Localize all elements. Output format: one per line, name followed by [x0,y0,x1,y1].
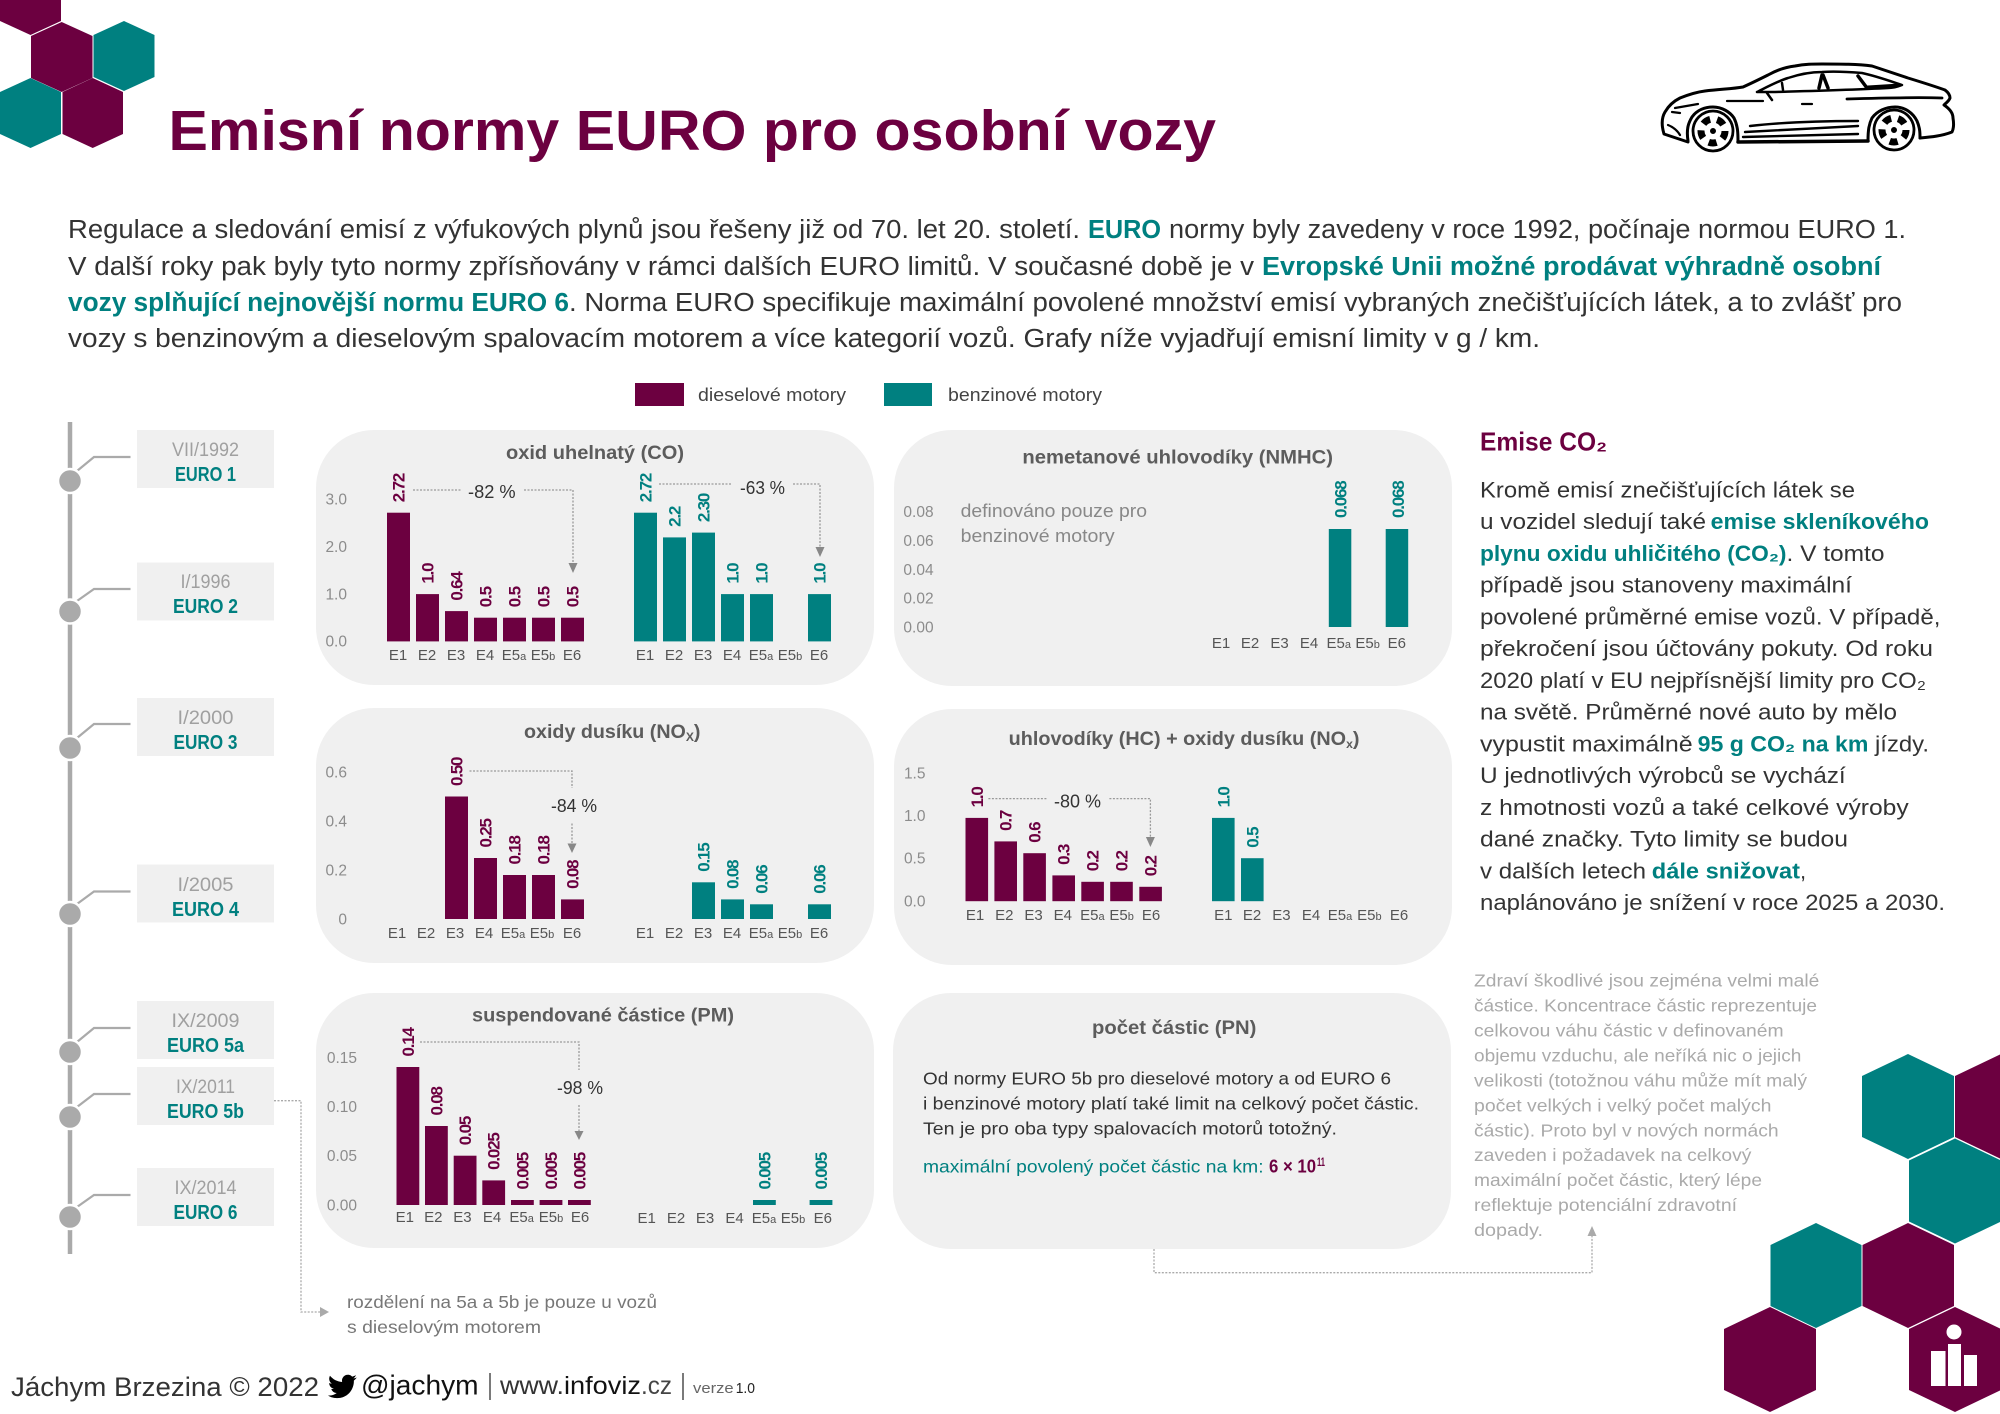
hexagon decoration: bottom right [1724,1054,2000,1412]
x labels: NMHC: E5a [1326,635,1352,652]
x labels: NOx: E1 [388,925,406,942]
x labels: NOx: E6 [563,925,581,942]
timeline item: EURO 2: I/1996 [180,572,230,593]
heading: NMHC: nemetanové uhlovodíky (NMHC) [1022,447,1333,469]
values: NOx: 0.08 [564,860,582,889]
heading: HC + NOx: uhlovodíky (HC) + oxidy dusíku (NO [1009,728,1341,750]
x labels: NMHC: E2 [1241,635,1259,652]
values: NMHC [1332,481,1408,518]
legend: benzinové motory [948,384,1103,405]
text block: CO2 emissions: . V tomto [1786,541,1884,566]
footer: verze [693,1380,734,1397]
x labels: CO: E1 [389,647,407,664]
bars: NOx petrol [692,882,831,919]
x labels: NMHC: E6 [1388,635,1406,652]
y axis: HC + NOx: 0.0 [904,894,926,910]
values: NOx: 0.15 [694,843,714,872]
values: NOx: 0.06 [810,865,830,894]
text block: particle health note: reflektuje potenciální zdravotní [1474,1195,1737,1215]
x labels: CO: E1 [636,647,654,664]
values: CO: 1.0 [724,563,742,584]
values: CO: 1.0 [752,563,772,584]
text block: particle health note: celkovou váhu částic v definovaném [1474,1021,1784,1041]
x labels: NMHC: E3 [1270,635,1289,652]
x labels: PM: E6 [571,1209,589,1226]
intro text block [68,216,1906,353]
text block: CO2 emissions: emise skleníkového [1711,509,1929,534]
x labels: PM: E2 [424,1209,442,1226]
x labels: HC + NOx: E6 [1390,907,1408,924]
x labels: CO: E4 [476,647,494,664]
x labels: CO: E4 [723,647,741,664]
y axis: HC + NOx: 1.0 [904,808,926,825]
timeline item: EURO 3: I/2000 [178,708,234,729]
x labels: HC + NOx: E3 [1024,907,1043,924]
values: CO: 0.64 [448,571,466,601]
x labels: PM: E3 [696,1210,714,1227]
heading: NOx: oxidy dusíku (NO [524,721,684,743]
bars: PM petrol [753,1200,832,1205]
heading: Emise CO2: Emise CO₂ [1480,427,1607,457]
values: CO: 0.5 [506,586,524,607]
intro text block: vozy s benzinovým a dieselovým spalovacím motorem a více kategorií vozů. Grafy níže vyjadřují emisní limity v g / km. [68,325,1540,353]
text: maximum particle count: 11 [1317,1155,1325,1169]
text block: CO2 emissions: na světě. Průměrné nové auto by mělo [1480,700,1897,725]
text block: particle health note: počet velkých i velký počet malých [1474,1096,1771,1116]
x labels: NOx: E5b [530,925,554,942]
y axis: NOx: 0.6 [325,764,347,782]
x labels: NOx: E4 [475,925,493,942]
y axis: NMHC: 0.04 [903,562,934,579]
text block: CO2 emissions [1480,478,1945,915]
text block: CO2 emissions: 95 g CO₂ na km [1698,732,1868,756]
text block: particle health note: velikosti (totožnou váhu může mít malý [1474,1071,1807,1091]
x labels: NMHC: E5b [1355,635,1380,652]
x labels: HC + NOx: E5a [1328,907,1353,924]
timeline item: EURO 5a [58,1001,274,1064]
values: NOx: 0.50 [448,757,466,786]
x labels: CO: E6 [810,647,828,664]
heading: PN: počet částic (PN) [1092,1017,1256,1039]
intro text block: EURO [1088,216,1161,244]
footer: @jachym [361,1370,479,1400]
x labels: NOx: E3 [446,925,464,942]
text block: CO2 emissions: povolené průměrné emise vozů. V případě, [1480,604,1940,630]
text block: CO2 emissions: vypustit maximálně [1480,732,1693,756]
arrow: HC + NOx diesel -80 %: -80 % [1054,792,1101,812]
values: NMHC: 0.068 [1332,481,1350,518]
y axis: PM: 0.00 [327,1198,357,1214]
y axis: PM: 0.05 [327,1148,357,1165]
panel: oxid uhelnatý (CO) [316,430,874,685]
values: HC + NOx [968,787,1262,876]
x labels: NOx: E3 [694,925,712,942]
text block: particle health note: dopady. [1474,1220,1543,1240]
timeline item: EURO 4: I/2005 [178,875,234,896]
y axis: HC + NOx [904,766,926,910]
text block: CO2 emissions: překročení jsou účtovány pokuty. Od roku [1480,636,1933,661]
values: CO: 0.5 [564,586,582,607]
x labels: NOx: E6 [810,925,828,942]
heading: HC + NOx: x [1346,737,1353,751]
x labels: NOx: E2 [417,925,435,942]
heading: PM: suspendované částice (PM) [472,1005,734,1027]
y axis: CO: 1.0 [325,586,347,604]
values: NOx [448,757,830,894]
x labels: PM [396,1209,832,1227]
values: PM: 0.08 [427,1086,446,1116]
x labels: PM: E1 [396,1209,414,1226]
x labels: NOx: E1 [636,925,654,942]
x labels: CO: E5a [502,647,527,664]
front wheel [1693,111,1733,151]
text block: CO2 emissions: 2020 platí v EU nejpřísnější limity pro CO₂ [1480,668,1926,693]
values: PM: 0.005 [755,1152,774,1190]
values: HC + NOx: 1.0 [968,787,987,807]
x labels: HC + NOx: E1 [966,907,984,924]
x labels: PM: E3 [453,1209,472,1226]
x labels: HC + NOx: E5b [1109,907,1134,924]
timeline item: EURO 6 [58,1168,274,1229]
timeline item: EURO 2 [58,562,274,624]
footer [11,1370,755,1402]
panel: počet částic (PN) [893,993,1451,1249]
text: PN description: i benzinové motory platí také limit na celkový počet částic. [923,1093,1419,1113]
values: CO: 1.0 [810,563,830,584]
heading: NOx: X [686,730,694,744]
values: CO [390,473,830,607]
x labels: NOx: E4 [723,925,741,942]
timeline item: EURO 5b: EURO 5b [167,1101,244,1123]
x labels: PM: E5a [752,1210,777,1227]
x labels: NOx: E5a [749,925,774,942]
values: HC + NOx: 0.5 [1243,827,1262,848]
text block: CO2 emissions: případě jsou stanoveny maximální [1480,573,1852,598]
text block: CO2 emissions: u vozidel sledují také [1480,509,1706,534]
values: CO: 2.2 [666,506,684,527]
x labels: HC + NOx: E5a [1080,907,1106,924]
intro text block: normy byly zavedeny v roce 1992, počínaje normou EURO 1. [1169,216,1906,244]
arrow: PM diesel -98 % [420,1042,603,1140]
timeline item: EURO 6: EURO 6 [174,1202,238,1224]
arrow: CO diesel -82 %: -82 % [468,482,516,502]
footer: .cz [641,1372,672,1400]
values: PM: 0.05 [456,1116,475,1145]
arrow: CO petrol -63 %: -63 % [740,478,785,498]
bars: HC + NOx diesel [966,818,1162,901]
values: HC + NOx: 0.2 [1112,851,1132,871]
y axis: NMHC: 0.00 [903,620,934,636]
panel: nemetanové uhlovodíky (NMHC) [894,430,1452,686]
footnote: 5a and 5b [347,1292,657,1337]
panel: suspendované částice (PM) [316,993,874,1248]
footer: 1.0 [736,1380,755,1397]
y axis: PM [327,1050,357,1214]
arrow: NOx diesel -84 %: -84 % [551,796,597,816]
x labels: CO [389,647,828,664]
y axis: CO: 2.0 [325,539,347,556]
hexagon decoration: top left [0,0,154,148]
x labels: HC + NOx: E5b [1357,907,1382,924]
text block: CO2 emissions: U jednotlivých výrobců se vychází [1480,763,1846,788]
text block: particle health note: objemu vzduchu, ale neříká nic o jejich [1474,1046,1801,1066]
text block: particle health note: částice. Koncentrace částic reprezentuje [1474,996,1817,1016]
y axis: NOx [325,764,347,928]
y axis: NOx: 0.4 [325,814,347,830]
x labels: NOx [388,925,828,942]
y axis: CO: 0.0 [325,634,347,650]
text block: particle health note: maximální počet částic, který lépe [1474,1170,1762,1190]
values: HC + NOx: 0.2 [1084,851,1103,871]
x labels: PM: E4 [483,1209,501,1226]
arrow: CO petrol -63 % [659,478,824,557]
x labels: CO: E5b [778,647,802,664]
x labels: HC + NOx: E4 [1302,907,1320,924]
intro text block: vozy splňující nejnovější normu EURO 6 [68,289,569,317]
x labels: NOx: E2 [665,925,683,942]
x labels: PM: E5a [509,1209,535,1226]
y axis: NOx: 0.2 [325,862,347,880]
x labels: HC + NOx: E2 [1243,907,1261,924]
footer: infoviz [564,1372,641,1400]
note: petrol only: benzinové motory [961,526,1115,546]
x labels: HC + NOx: E3 [1272,907,1291,924]
timeline item: EURO 1 [58,430,274,493]
text: PN description: Ten je pro oba typy spalovacích motorů totožný. [923,1118,1337,1138]
values: HC + NOx: 1.0 [1214,787,1233,807]
panel: uhlovodíky (HC) + oxidy dusíku (NOx) [894,709,1452,965]
text block: particle health note: Zdraví škodlivé jsou zejména velmi malé [1474,971,1819,991]
y axis: NMHC: 0.02 [903,590,934,608]
legend [635,383,1103,406]
bars: PM diesel [396,1067,591,1205]
note: petrol only: definováno pouze pro [961,501,1147,521]
arrow: CO diesel -82 % [413,482,578,573]
text block: CO2 emissions: , [1800,858,1806,884]
timeline item: EURO 6: IX/2014 [174,1178,237,1199]
footer: Jáchym Brzezina © 2022 [11,1372,319,1402]
text block: CO2 emissions: dále snižovat [1652,858,1801,884]
timeline item: EURO 1: VII/1992 [172,440,239,461]
x labels: PM: E1 [638,1210,656,1227]
timeline item: EURO 2: EURO 2 [173,596,238,618]
text: maximum particle count: maximální povolený počet částic na km: [923,1157,1264,1177]
icon: car [1662,64,1954,151]
intro text block: . Norma EURO specifikuje maximální povolené množství emisí vybraných znečišťujících látek, a to zvlášť pro [569,289,1902,317]
text: PN description [923,1068,1419,1138]
values: PM: 0.005 [513,1152,532,1190]
arrow: PM diesel -98 %: -98 % [557,1078,603,1098]
heading: NOx: ) [694,721,700,743]
icon: infoviz logo [1931,1324,1977,1386]
values: NOx: 0.25 [476,818,496,848]
values: HC + NOx: 0.2 [1142,856,1161,876]
x labels: PM: E4 [725,1210,744,1227]
values: PM: 0.005 [570,1152,589,1190]
values: PM: 0.14 [399,1026,418,1056]
text block: CO2 emissions: jízdy. [1874,732,1929,756]
values: HC + NOx: 0.6 [1026,822,1045,843]
text: maximum particle count: 6 × 10 [1269,1157,1316,1177]
x labels: CO: E3 [447,647,465,664]
timeline item: EURO 1: EURO 1 [175,464,236,486]
timeline item: EURO 3 [58,698,274,760]
text block: CO2 emissions: z hmotnosti vozů a také celkové výroby [1480,795,1909,820]
values: CO: 0.5 [476,586,496,607]
timeline [58,422,274,1254]
x labels: HC + NOx: E1 [1214,907,1232,924]
values: NOx: 0.06 [752,865,772,894]
values: CO: 0.5 [534,586,554,607]
bars: NOx diesel [445,796,584,919]
text block: CO2 emissions: Kromě emisí znečišťujících látek se [1480,478,1855,502]
bars: CO diesel [387,513,584,641]
intro text block: V další roky pak byly tyto normy zpřísňovány v rámci dalších EURO limitů. V současné době je v [68,253,1254,281]
text block: particle health note [1474,971,1819,1240]
values: NOx: 0.08 [724,860,742,889]
y axis: HC + NOx: 1.5 [904,766,926,782]
y axis: PM: 0.10 [327,1099,357,1116]
intro text block: Regulace a sledování emisí z výfukových plynů jsou řešeny již od 70. let 20. století. [68,216,1080,244]
text block: CO2 emissions: plynu oxidu uhličitého (CO₂) [1480,541,1786,566]
timeline item: EURO 5a: EURO 5a [167,1035,245,1057]
timeline item: EURO 5b: IX/2011 [176,1077,235,1098]
timeline item: EURO 4 [58,864,274,926]
values: NOx: 0.18 [534,835,554,864]
values: PM: 0.005 [542,1152,561,1190]
y axis: PM: 0.15 [327,1050,357,1067]
x labels: HC + NOx: E2 [995,907,1013,924]
timeline item: EURO 3: EURO 3 [174,732,238,754]
y axis: NMHC: 0.08 [903,504,934,521]
x labels: PM: E5b [539,1209,563,1226]
heading: CO: oxid uhelnatý (CO) [506,442,684,464]
values: CO: 2.30 [694,493,714,522]
note: petrol only [961,501,1147,546]
bars: NMHC petrol [1329,529,1408,627]
x labels: CO: E5b [531,647,555,664]
values: CO: 2.72 [390,473,408,502]
x labels: CO: E5a [749,647,774,664]
x labels: PM: E2 [667,1210,685,1227]
panel: oxidy dusíku (NOx) [316,708,874,963]
x labels: HC + NOx: E4 [1054,907,1072,924]
x labels: CO: E2 [665,647,683,664]
intro text block: Evropské Unii možné prodávat výhradně osobní [1262,253,1882,281]
text block: CO2 emissions: naplánováno je snížení v roce 2025 a 2030. [1480,890,1945,915]
values: NOx: 0.18 [506,835,524,864]
heading: HC + NOx: ) [1353,728,1360,750]
title: Emisní normy EURO pro osobní vozy [168,99,1216,163]
bars: CO petrol [634,513,831,641]
icon: twitter bird [328,1375,357,1398]
timeline item: EURO 5b [58,1067,274,1129]
values: HC + NOx: 0.3 [1055,844,1074,865]
x labels: PM: E6 [814,1210,832,1227]
values: CO: 1.0 [418,563,438,584]
footer: www. [499,1372,564,1400]
values: PM [399,1026,831,1190]
footnote: 5a and 5b: rozdělení na 5a a 5b je pouze u vozů [347,1292,657,1312]
legend: dieselové motory [698,384,847,405]
arrow: EURO 5b to footnote [274,1101,329,1317]
x labels: NMHC [1212,635,1406,652]
values: NMHC: 0.068 [1389,481,1408,518]
footnote: 5a and 5b: s dieselovým motorem [347,1317,541,1337]
x labels: NOx: E5b [778,925,802,942]
arrow: PN panel to health note [1154,1226,1596,1273]
timeline item: EURO 4: EURO 4 [172,899,240,921]
x labels: HC + NOx [966,907,1408,924]
y axis: CO: 3.0 [325,492,347,508]
y axis: NMHC [903,504,934,636]
x labels: NMHC: E4 [1300,635,1318,652]
values: PM: 0.025 [485,1133,504,1170]
x labels: PM: E5b [781,1210,805,1227]
x labels: HC + NOx: E6 [1142,907,1160,924]
text block: CO2 emissions: v dalších letech [1480,858,1646,884]
x labels: NOx: E5a [501,925,526,942]
text block: CO2 emissions: dané značky. Tyto limity se budou [1480,827,1848,852]
x labels: CO: E3 [694,647,712,664]
values: PM: 0.005 [812,1152,831,1190]
y axis: HC + NOx: 0.5 [904,851,926,868]
x labels: CO: E6 [563,647,581,664]
text: PN description: Od normy EURO 5b pro dieselové motory a od EURO 6 [923,1068,1391,1088]
x labels: CO: E2 [418,647,436,664]
timeline item: EURO 5a: IX/2009 [172,1011,240,1032]
text block: particle health note: zaveden i požadavek na celkový [1474,1145,1752,1165]
values: CO: 2.72 [636,473,656,502]
values: HC + NOx: 0.7 [997,810,1016,831]
y axis: NMHC: 0.06 [903,533,934,550]
x labels: NMHC: E1 [1212,635,1230,652]
y axis: CO [325,492,347,650]
arrow: HC + NOx diesel -80 % [988,792,1155,847]
y axis: NOx: 0 [338,912,347,928]
bars: HC + NOx petrol [1212,818,1264,901]
rear wheel [1874,110,1914,150]
text block: particle health note: částic). Proto byl v nových normách [1474,1121,1779,1141]
arrow: NOx diesel -84 % [470,771,597,853]
